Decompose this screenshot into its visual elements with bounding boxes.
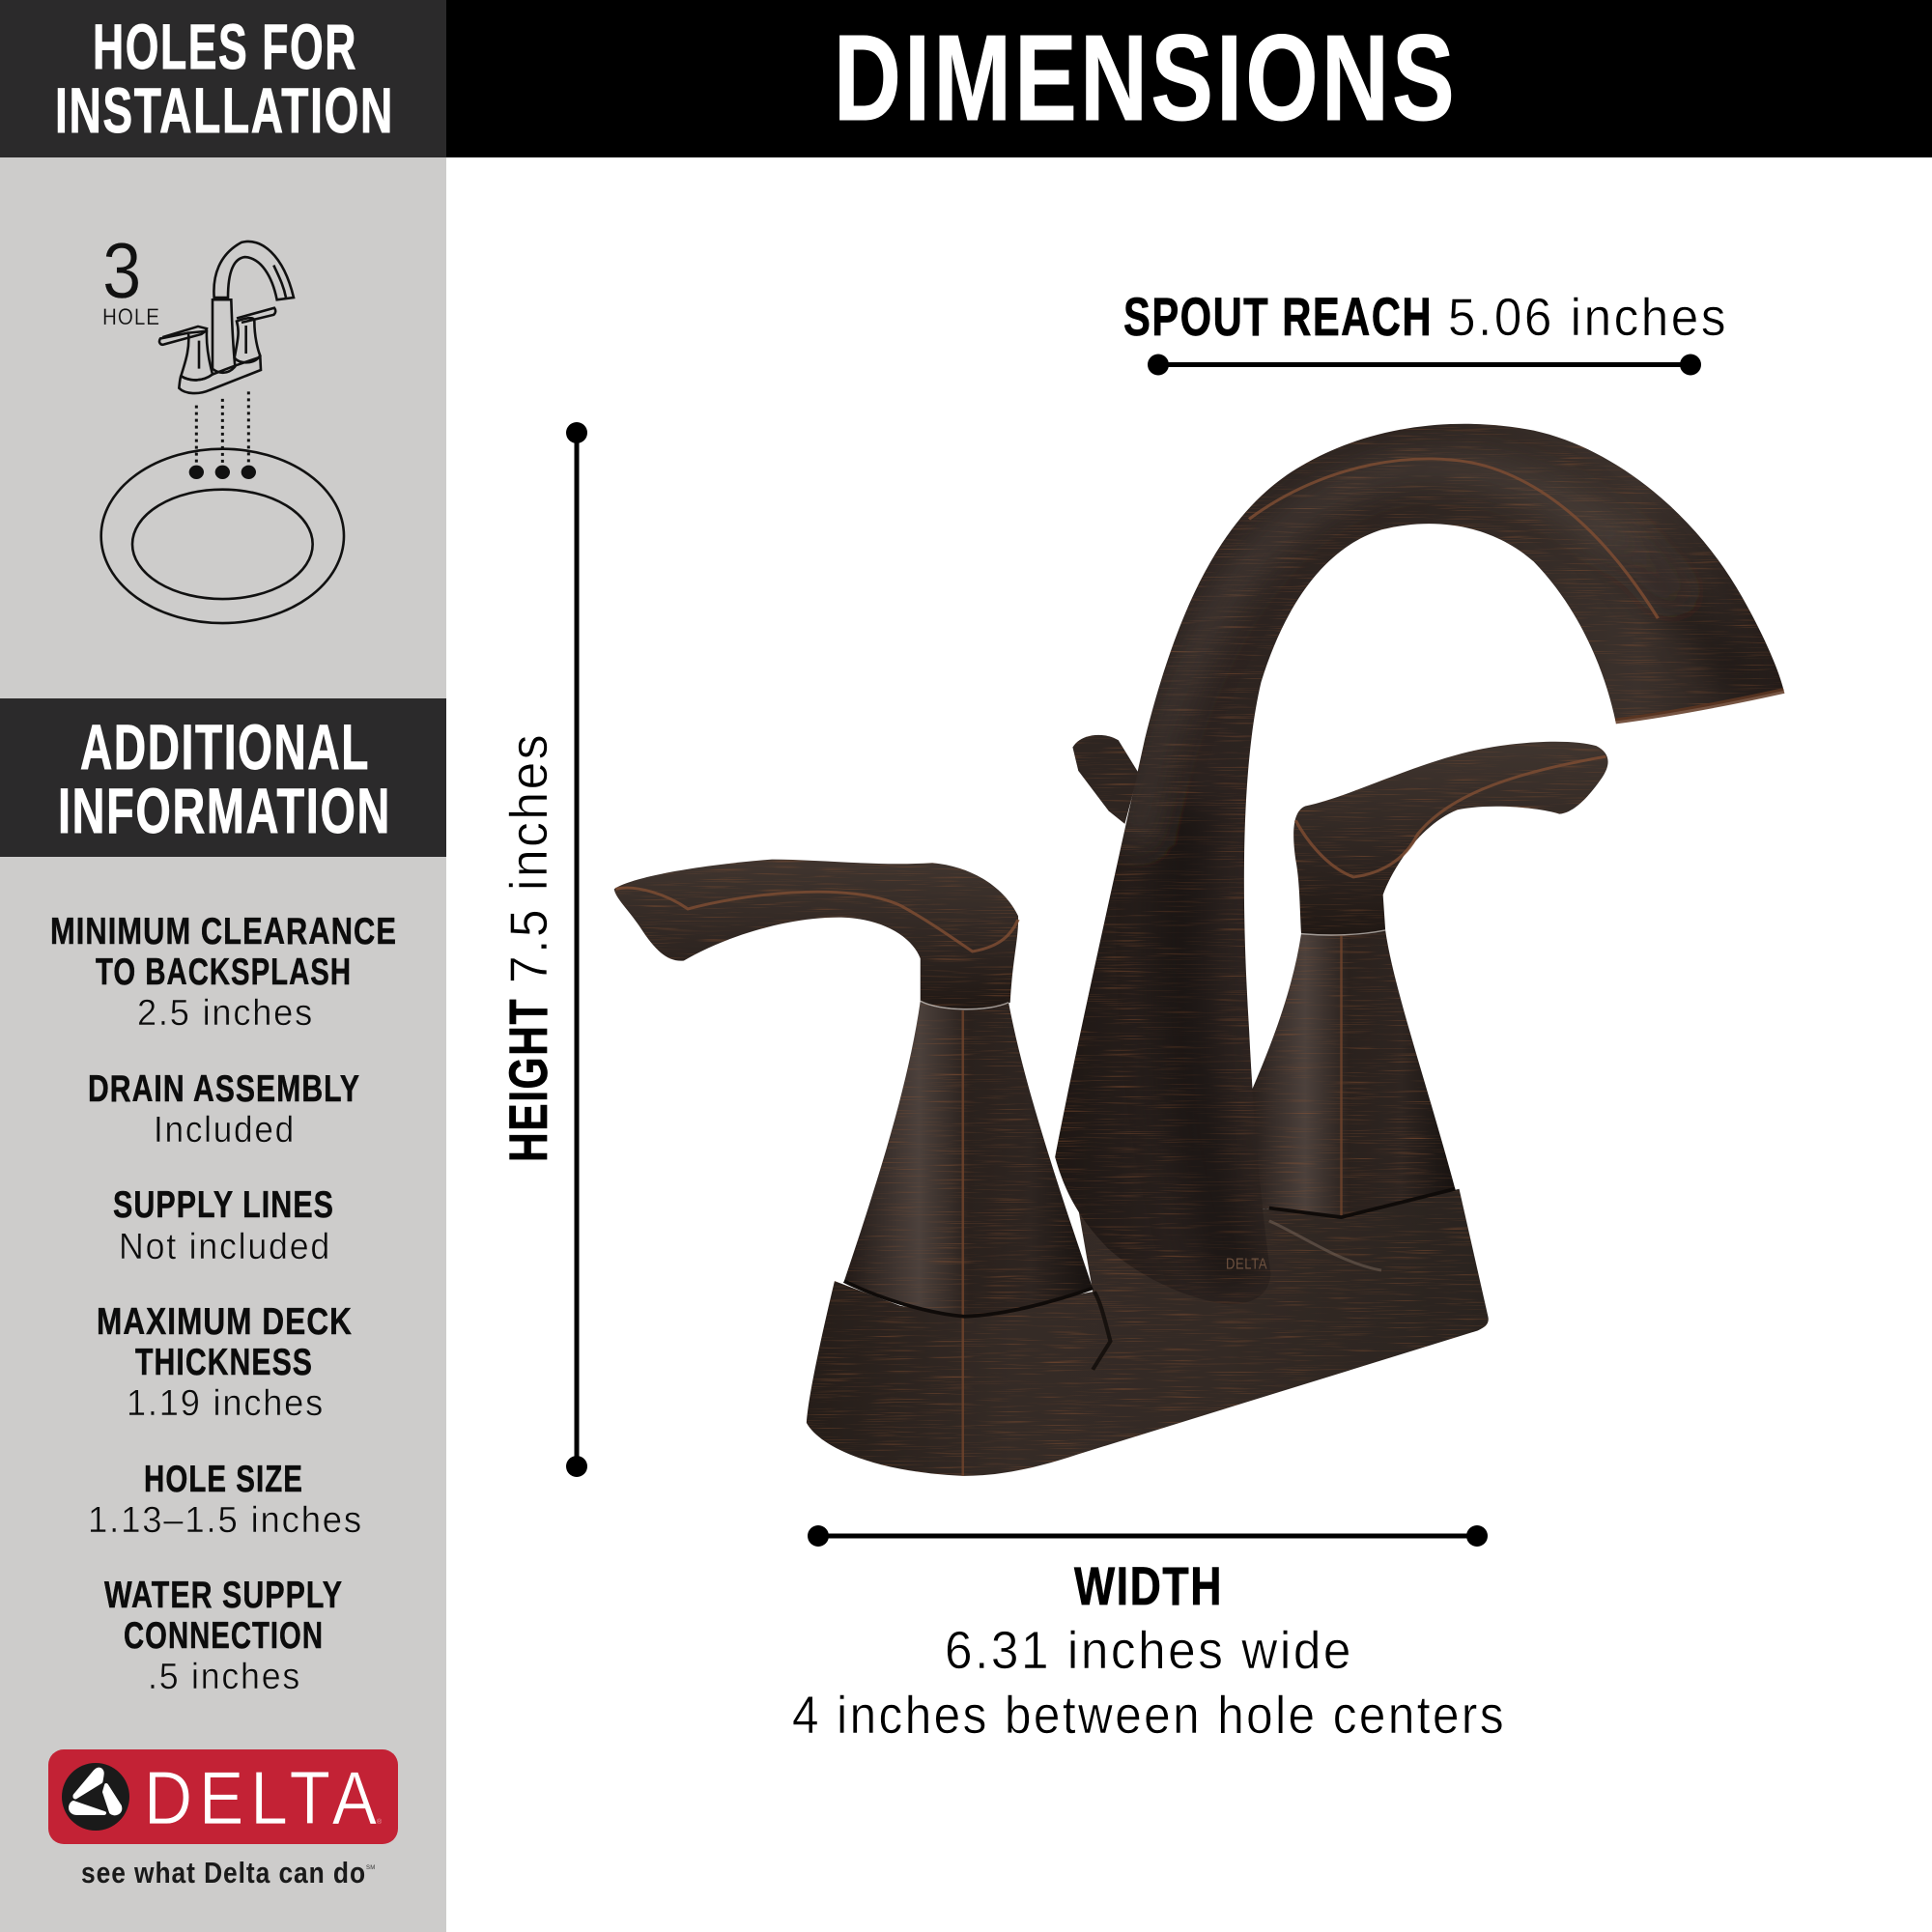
spec: supply lines [113, 1184, 334, 1267]
spec: maximum deck thickness: MAXIMUM DECK [97, 1301, 353, 1343]
spec: minimum clearance: 2.5 inches [137, 993, 314, 1034]
spec: maximum deck thickness: THICKNESS [135, 1342, 313, 1383]
heading: holes for installation [0, 0, 446, 157]
heading: additional information: ADDITIONAL [80, 711, 370, 782]
dimension: spout reach [1123, 286, 1728, 375]
spec: drain assembly [88, 1068, 360, 1151]
spec: supply lines: Not included [119, 1227, 331, 1267]
engraved brand mark: DELTA [1226, 1255, 1267, 1272]
spout sheen and shadow [1133, 467, 1743, 1285]
heading: additional information [0, 698, 446, 857]
handle seam shadows [844, 930, 1455, 1317]
heading: holes for installation: HOLES FOR [93, 11, 357, 82]
logo: delta [48, 1749, 398, 1889]
icon: faucet over sink diagram [101, 242, 344, 623]
dimension: width: WIDTH [1074, 1555, 1223, 1616]
spec: water supply connection: .5 inches [148, 1657, 301, 1697]
dimension: height: 7.5 inches [498, 732, 558, 983]
spec: hole size [88, 1459, 363, 1541]
dimension: spout reach: 5.06 inches [1448, 287, 1728, 347]
logo: delta: SM [366, 1865, 376, 1871]
spec: supply lines: SUPPLY LINES [113, 1184, 334, 1226]
icon: delta emblem [62, 1763, 129, 1831]
base deck [807, 1189, 1489, 1476]
dimension: height: HEIGHT [497, 998, 558, 1162]
spec: water supply connection [104, 1575, 343, 1697]
dimension: width: 6.31 inches wide [945, 1620, 1353, 1680]
icon: three hole label: HOLE [102, 304, 160, 330]
title bar: dimensions [446, 0, 1932, 157]
spec: drain assembly: DRAIN ASSEMBLY [88, 1068, 360, 1110]
dimension: width [792, 1525, 1506, 1745]
left handle lever [614, 860, 1018, 1009]
spec: maximum deck thickness [97, 1301, 353, 1424]
spec: hole size: 1.13–1.5 inches [88, 1500, 363, 1541]
heading: additional information: INFORMATION [58, 775, 391, 846]
heading: holes for installation: INSTALLATION [55, 74, 394, 146]
spec: hole size: HOLE SIZE [144, 1459, 303, 1500]
spec: drain assembly: Included [154, 1110, 296, 1151]
right handle [1241, 742, 1608, 1217]
spec: water supply connection: CONNECTION [124, 1615, 324, 1657]
logo: delta: DELTA [144, 1755, 384, 1840]
spout and body [1055, 424, 1784, 1304]
dimension: height [497, 422, 587, 1477]
dimension: width: 4 inches between hole centers [792, 1685, 1506, 1745]
panel: left sidebar [0, 0, 446, 1932]
spec: maximum deck thickness: 1.19 inches [127, 1383, 325, 1424]
spec: minimum clearance: TO BACKSPLASH [96, 952, 352, 993]
title text: DIMENSIONS [834, 10, 1458, 146]
left handle cone [844, 1001, 1093, 1317]
icon: three hole label: 3 [102, 227, 145, 315]
tagline: see what Delta can do [81, 1856, 366, 1889]
spec: minimum clearance [50, 911, 397, 1034]
spec: water supply connection: WATER SUPPLY [104, 1575, 343, 1616]
rear lever stub [1072, 735, 1139, 824]
dimension: spout reach: SPOUT REACH [1123, 286, 1433, 347]
copper highlights [615, 459, 1784, 1476]
illustration: bronze faucet [614, 424, 1784, 1476]
spec: minimum clearance: MINIMUM CLEARANCE [50, 911, 397, 952]
logo: delta: ® [377, 1818, 383, 1826]
